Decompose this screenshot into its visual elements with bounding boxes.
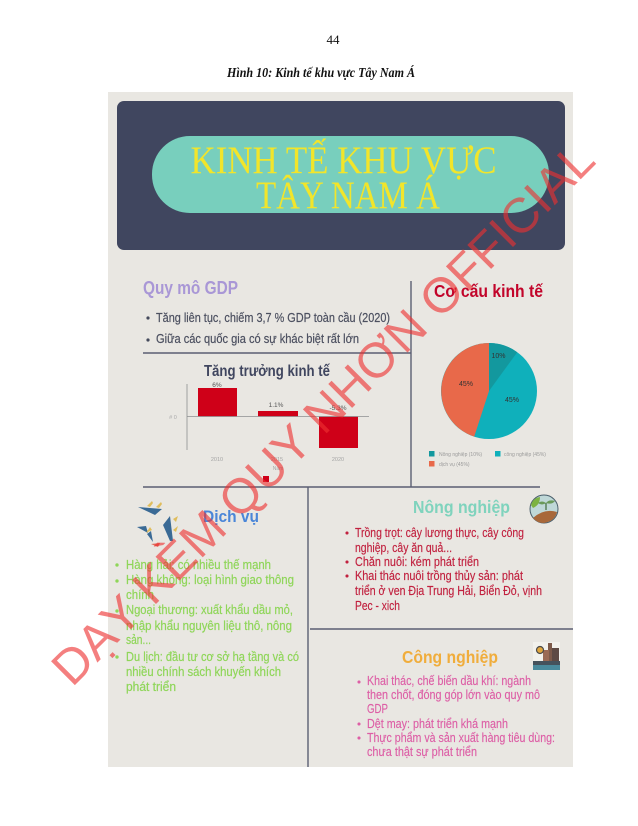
panel: services: [115, 507, 299, 694]
pie chart legend: Nông nghiệp (10%): [439, 452, 482, 458]
panel: industry: Dệt may: phát triển khá mạnh: [367, 717, 508, 731]
panel: services: phát triển: [126, 680, 176, 694]
panel: agriculture: Pec - xich: [355, 599, 400, 613]
icon: airplane: [137, 501, 178, 547]
infographic background panel: [108, 92, 573, 767]
title banner: TÂY NAM Á: [256, 173, 440, 217]
bar chart: economic growth: 2015: [271, 457, 283, 463]
pie chart: economic structure: 45%: [505, 397, 519, 404]
panel: industry: Công nghiệp: [402, 647, 498, 667]
panel: agriculture: nghiệp, cây ăn quả...: [355, 541, 452, 555]
bar chart: economic growth: # 0: [169, 415, 177, 421]
panel: industry: then chốt, đóng góp lớn vào quy mô: [367, 688, 540, 702]
bar chart: economic growth: 1.1%: [269, 402, 284, 409]
panel: services: Hàng hải: có nhiều thế mạnh: [126, 558, 271, 572]
panel: services: sản...: [126, 633, 151, 647]
panel: services: nhiều chính sách khuyến khích: [126, 665, 281, 679]
panel: services: nhập khẩu nguyên liệu thô, nông: [126, 619, 292, 633]
panel: GDP scale: Giữa các quốc gia có sự khác biệt rất lớn: [156, 332, 359, 346]
panel: economic structure heading: Cơ cấu kinh tế: [434, 281, 543, 301]
bar chart: economic growth: Tăng trưởng kinh tế: [204, 363, 330, 380]
panel: services: chính: [126, 588, 154, 602]
title banner: [117, 101, 565, 250]
bar chart: economic growth: [169, 363, 369, 482]
bar chart: economic growth: Năm: [273, 466, 283, 472]
figure caption: Hình 10: Kinh tế khu vực Tây Nam Á: [226, 65, 415, 80]
title banner: KINH TẾ KHU VỰC: [190, 137, 496, 182]
bar chart: economic growth: 6%: [212, 382, 222, 389]
bar chart: economic growth: 2020: [332, 457, 344, 463]
panel: services: Dịch vụ: [203, 507, 259, 526]
panel: agriculture: [346, 497, 542, 613]
panel: GDP scale: Quy mô GDP: [143, 278, 238, 298]
panel: GDP scale: [143, 278, 390, 346]
page number: 44: [326, 32, 340, 47]
watermark: DẠY KÈM QUY NHƠN OFFICIAL: [42, 132, 605, 696]
icon: factory: [533, 642, 560, 670]
panel: industry: [358, 647, 555, 759]
panel: agriculture: Khai thác nuôi trồng thủy sản: phát: [355, 569, 523, 583]
panel: industry: chưa thật sự phát triển: [367, 745, 477, 759]
pie chart: economic structure: [441, 343, 537, 439]
bar chart: economic growth: 2010: [211, 457, 223, 463]
panel: GDP scale: Tăng liên tục, chiếm 3,7 % GDP toàn cầu (2020): [156, 311, 390, 325]
panel: agriculture: Chăn nuôi: kém phát triển: [355, 555, 479, 569]
panel: agriculture: Trồng trọt: cây lương thực, cây công: [355, 526, 524, 540]
panel: agriculture: Nông nghiệp: [413, 497, 510, 517]
panel: services: Ngoại thương: xuất khẩu dầu mỏ,: [126, 603, 293, 617]
panel: agriculture: triển ở ven Địa Trung Hải, Biển Đỏ, vịnh: [355, 584, 542, 598]
panel: industry: Thực phẩm và sản xuất hàng tiêu dùng:: [367, 731, 555, 745]
divider lines: [143, 281, 573, 767]
panel: services: Du lịch: đầu tư cơ sở hạ tầng và có: [126, 650, 299, 664]
panel: services: Hàng không: loại hình giao thông: [126, 573, 294, 587]
pie chart legend: dịch vụ (45%): [439, 462, 470, 468]
pie chart legend: công nghiệp (45%): [504, 452, 546, 458]
pie chart: economic structure: 45%: [459, 381, 473, 388]
bar chart: economic growth: -5.3%: [330, 405, 347, 412]
pie chart: economic structure: 10%: [491, 353, 506, 360]
pie chart legend: [429, 451, 546, 468]
panel: industry: Khai thác, chế biến dầu khí: ngành: [367, 674, 531, 688]
panel: industry: GDP: [367, 702, 388, 716]
icon: seedling: [530, 495, 558, 523]
